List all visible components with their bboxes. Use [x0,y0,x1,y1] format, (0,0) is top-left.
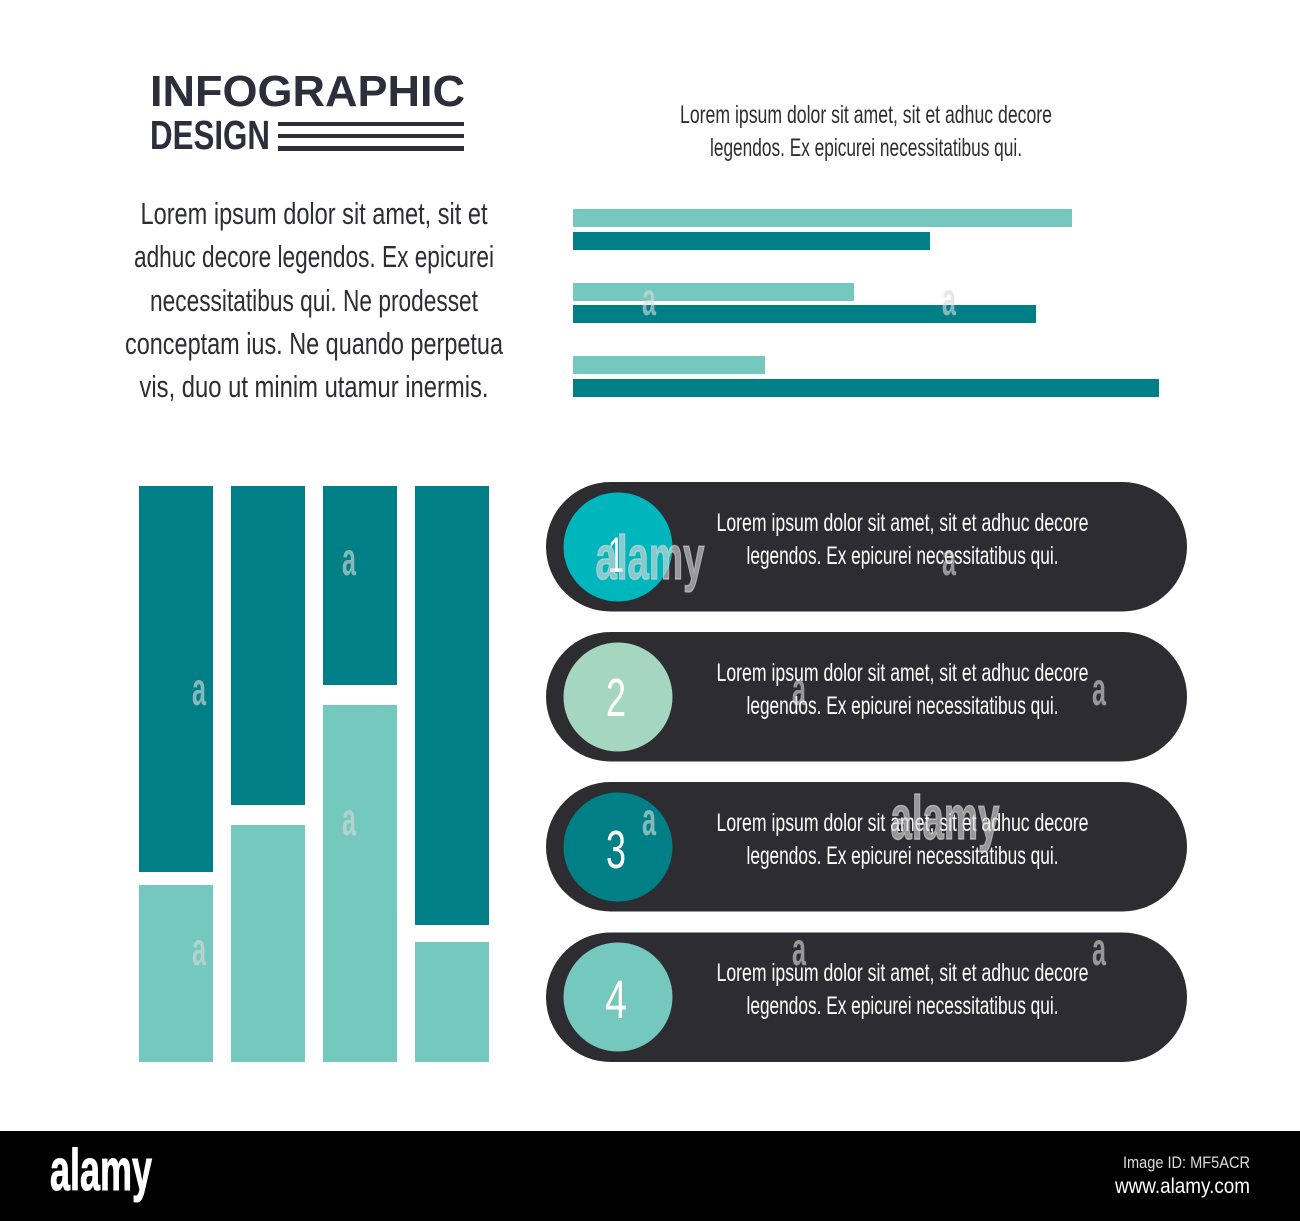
watermarks: a [942,533,956,585]
watermarks: alamy [596,524,705,593]
icon: number 4 circle [564,942,672,1052]
panel: item 3: Lorem ipsum dolor sit amet, sit et adhuc decore [716,809,1088,837]
watermarks: a [642,273,656,325]
panel: item 2: legendos. Ex epicurei necessitatibus qui. [746,692,1058,720]
title [150,67,465,158]
panel: item 3: legendos. Ex epicurei necessitatibus qui. [746,842,1058,870]
icon: number 2 circle [564,642,672,752]
footer band: www.alamy.com [1114,1175,1250,1198]
panel: item 3 [546,782,1187,912]
footer band [0,1131,1300,1221]
icon: number 1 circle [564,492,672,602]
panel: item 1 [546,482,1187,612]
text block: bar chart caption: legendos. Ex epicurei necessitatibus qui. [710,134,1022,162]
panel: item 1: Lorem ipsum dolor sit amet, sit et adhuc decore [716,509,1088,537]
panel: item 4: legendos. Ex epicurei necessitatibus qui. [746,992,1058,1020]
icon: number 1 circle: 1 [608,527,624,583]
watermarks [192,273,1106,975]
icon: number 4 circle: 4 [605,970,627,1030]
footer band: alamy [50,1138,152,1203]
watermarks: a [792,923,806,975]
panel: item 2: Lorem ipsum dolor sit amet, sit et adhuc decore [716,659,1088,687]
watermarks: a [792,663,806,715]
footer band: Image ID: MF5ACR [1123,1153,1250,1172]
watermarks: a [1092,663,1106,715]
text block: bar chart caption [680,101,1052,162]
icon: number 2 circle: 2 [606,668,626,728]
text block: bar chart caption: Lorem ipsum dolor sit amet, sit et adhuc decore [680,101,1052,129]
panel: item 4 [546,932,1187,1062]
watermarks: a [1092,923,1106,975]
watermarks: a [642,793,656,845]
icon: number 3 circle: 3 [606,820,626,880]
watermarks: a [342,533,356,585]
text block: intro paragraph: necessitatibus qui. Ne prodesset [150,283,478,318]
watermarks: a [342,793,356,845]
text block: intro paragraph: Lorem ipsum dolor sit amet, sit et [140,196,488,231]
watermarks: a [942,273,956,325]
watermarks: alamy [890,784,1000,853]
watermarks: a [192,663,206,715]
watermarks: a [192,923,206,975]
title: INFOGRAPHIC [150,67,465,116]
panel: item 1: legendos. Ex epicurei necessitatibus qui. [746,542,1058,570]
text block: intro paragraph: conceptam ius. Ne quando perpetua [125,326,504,361]
text block: intro paragraph [125,196,504,404]
title: DESIGN [150,112,270,158]
text block: intro paragraph: adhuc decore legendos. Ex epicurei [134,239,494,274]
panel: item 2 [546,632,1187,762]
text block: intro paragraph: vis, duo ut minim utamur inermis. [140,369,488,404]
stacked column chart [139,486,489,1062]
panel: item 4: Lorem ipsum dolor sit amet, sit et adhuc decore [716,959,1088,987]
icon: number 3 circle [564,792,672,902]
horizontal bar chart [573,209,1159,397]
